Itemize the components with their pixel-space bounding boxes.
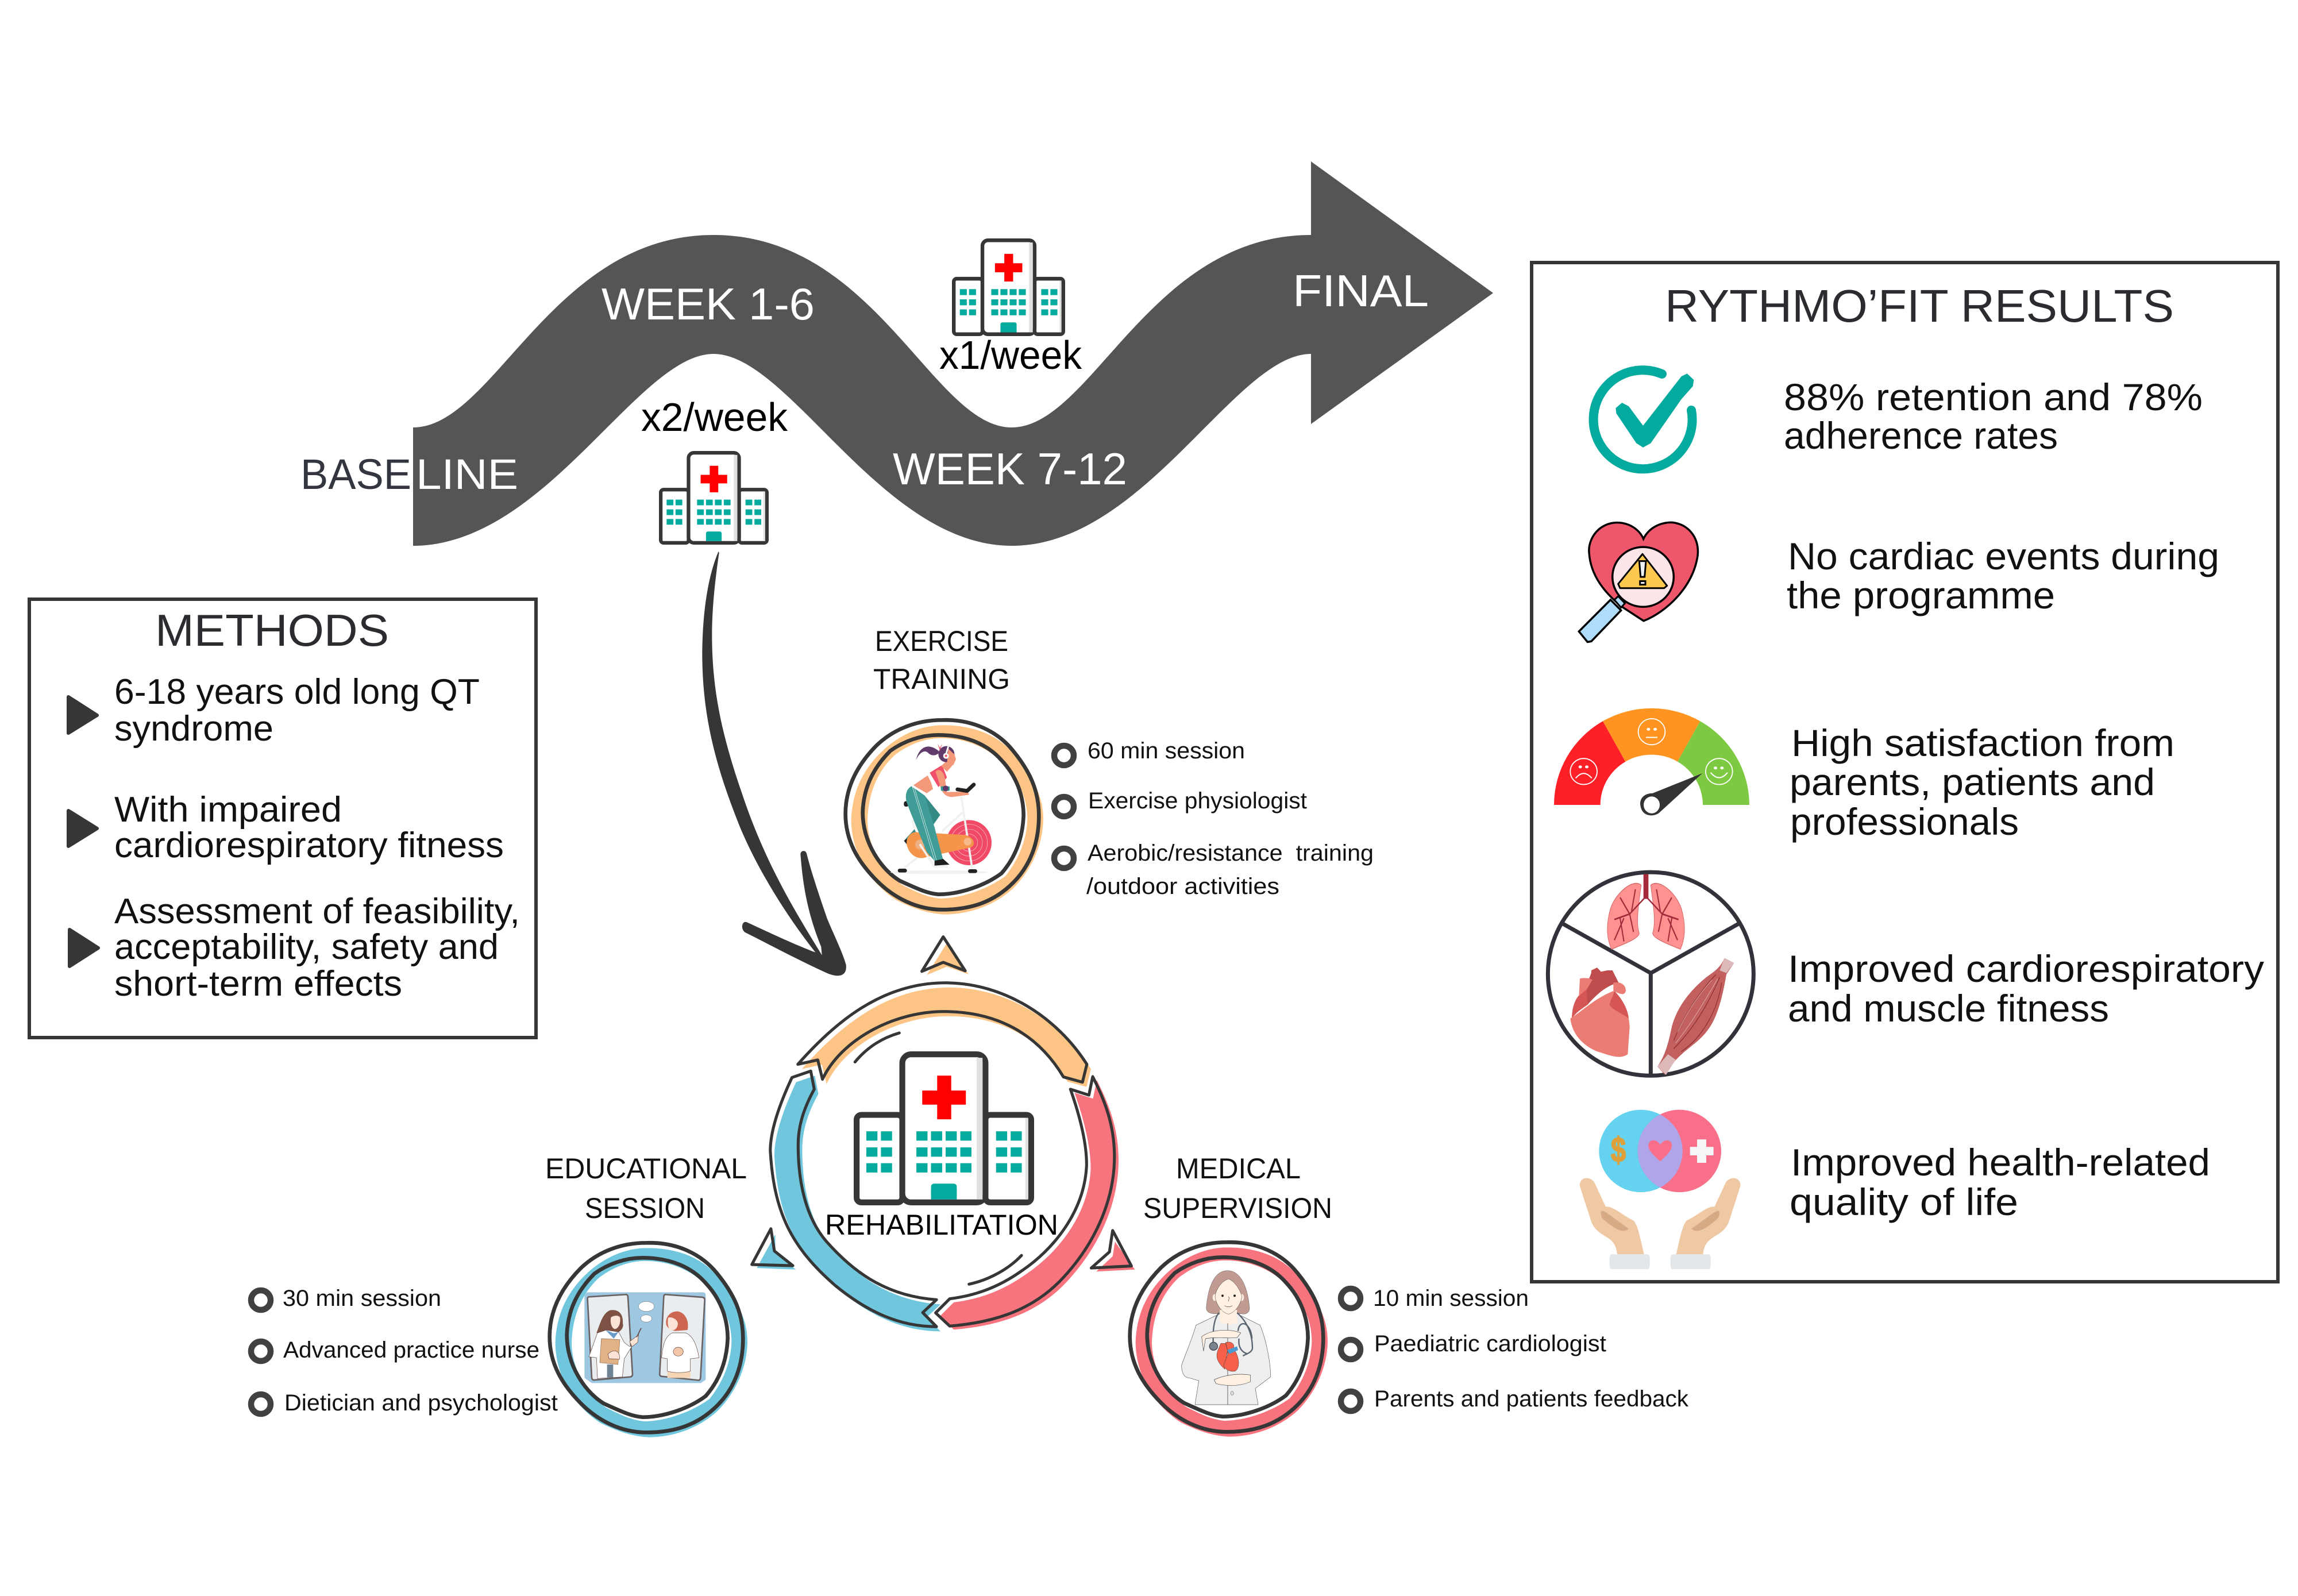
result text: retention: adherence rates <box>1784 414 2058 457</box>
methods item 3 <box>114 892 520 1004</box>
icon: quality of life hands: $ <box>1611 1131 1626 1169</box>
muscle <box>1657 958 1734 1075</box>
icon: rehabilitation hospital <box>857 1054 1031 1202</box>
result text: satisfaction: professionals <box>1790 800 2019 843</box>
result text: quality of life <box>1790 1141 2210 1223</box>
arrow: blue <box>770 1071 940 1331</box>
bullets: exercise training: 60 min session <box>1088 738 1245 764</box>
icon: hospital x1 per week <box>954 240 1063 334</box>
methods item 1: 6-18 years old long QT <box>114 672 480 712</box>
methods item 2: With impaired <box>114 790 342 830</box>
result text: satisfaction: High satisfaction from <box>1791 722 2174 764</box>
bullets: medical supervision <box>1341 1286 1689 1412</box>
timeline label: baseline: BASE <box>300 450 411 498</box>
bullets: exercise training: Aerobic/resistance training <box>1088 841 1374 866</box>
arrow: red <box>936 1077 1119 1329</box>
timeline label: week 1-6: WEEK 1-6 <box>602 279 815 329</box>
result text: no cardiac events: the programme <box>1787 574 2055 616</box>
circle: exercise training <box>846 720 1043 915</box>
methods box <box>29 599 536 1038</box>
bullet arrow 1 <box>68 697 97 733</box>
result text: fitness: and muscle fitness <box>1788 987 2109 1030</box>
icon: satisfaction gauge <box>1554 708 1749 815</box>
results box <box>1532 263 2278 1282</box>
results heading: RYTHMO’FIT RESULTS <box>1665 280 2174 331</box>
methods item 1 <box>114 672 480 749</box>
heading: exercise training <box>873 625 1010 695</box>
result text: no cardiac events: No cardiac events during <box>1788 535 2219 577</box>
icon: heart with magnifier warning <box>1579 522 1698 642</box>
lungs <box>1607 874 1684 949</box>
bullet arrow 3 <box>70 930 98 966</box>
methods heading: METHODS <box>155 605 389 656</box>
bullets: medical supervision: 10 min session <box>1373 1286 1529 1311</box>
heading: educational session <box>545 1152 747 1224</box>
result text: quality of life: quality of life <box>1790 1181 2018 1223</box>
result text: retention <box>1784 376 2203 457</box>
bullets: educational session: 30 min session <box>283 1286 441 1311</box>
methods item 3: acceptability, safety and <box>114 927 499 967</box>
arrow: orange <box>798 983 1091 1087</box>
label: rehabilitation: REHABILITATION <box>825 1209 1058 1241</box>
bullets: exercise training <box>1054 738 1374 899</box>
bullets: exercise training: Exercise physiologist <box>1088 788 1307 814</box>
icon: check mark <box>1594 370 1694 469</box>
icon: lungs, heart and muscle <box>1548 872 1753 1075</box>
heading: medical supervision: MEDICAL <box>1176 1152 1301 1185</box>
heading: exercise training: EXERCISE <box>875 625 1008 657</box>
illustration: woman on exercise bike <box>890 743 992 874</box>
heading: medical supervision: SUPERVISION <box>1143 1192 1332 1224</box>
heart <box>1570 967 1630 1057</box>
result text: no cardiac events <box>1787 535 2219 616</box>
timeline ribbon arrow <box>413 161 1493 546</box>
arrow: timeline to rehabilitation <box>702 552 846 976</box>
methods item 2: cardiorespiratory fitness <box>114 826 504 865</box>
triangle: blue <box>752 1229 796 1270</box>
bullets: exercise training: /outdoor activities <box>1086 874 1279 899</box>
result text: retention: 88% retention and 78% <box>1784 376 2203 418</box>
bullets: educational session <box>251 1286 558 1416</box>
methods item 3: short-term effects <box>114 964 402 1004</box>
icon: quality of life hands <box>1580 1110 1740 1269</box>
methods item 3: Assessment of feasibility, <box>114 892 520 931</box>
methods item 2 <box>114 790 504 865</box>
methods item 1: syndrome <box>114 709 273 749</box>
result text: satisfaction: parents, patients and <box>1790 761 2155 803</box>
triangle: red <box>1091 1231 1135 1271</box>
timeline label: final: FINAL <box>1293 265 1429 316</box>
timeline label: baseline <box>300 450 518 498</box>
bullets: medical supervision: Paediatric cardiologist <box>1374 1331 1606 1356</box>
result text: fitness: Improved cardiorespiratory <box>1788 947 2264 990</box>
heading: medical supervision <box>1143 1152 1332 1224</box>
heading: educational session: SESSION <box>585 1192 705 1224</box>
label: x2/week: x2/week <box>641 395 788 440</box>
timeline label: week 7-12: WEEK 7-12 <box>893 444 1127 494</box>
triangle: orange <box>922 937 969 975</box>
result text: satisfaction <box>1790 722 2174 843</box>
timeline label: baseline: LINE <box>416 450 518 498</box>
icon: hospital x2 per week <box>661 453 767 543</box>
heading: educational session: EDUCATIONAL <box>545 1152 747 1185</box>
rehabilitation cycle <box>752 937 1135 1331</box>
heading: exercise training: TRAINING <box>873 663 1010 695</box>
panel: methods <box>29 599 536 1038</box>
bullet arrow 2 <box>68 811 97 846</box>
circle: educational session <box>550 1243 747 1437</box>
circle: medical supervision <box>1130 1242 1328 1437</box>
label: x1/week: x1/week <box>939 333 1082 377</box>
illustration: doctor holding heart <box>1182 1271 1271 1405</box>
illustration: teleconsultation <box>584 1292 705 1383</box>
bullets: medical supervision: Parents and patients feedback <box>1374 1386 1689 1412</box>
result text: fitness <box>1788 947 2264 1030</box>
result text: quality of life: Improved health-related <box>1791 1141 2210 1183</box>
bullets: educational session: Advanced practice nurse <box>283 1337 539 1363</box>
panel: results <box>1532 263 2278 1282</box>
bullets: educational session: Dietician and psychologist <box>284 1390 558 1416</box>
